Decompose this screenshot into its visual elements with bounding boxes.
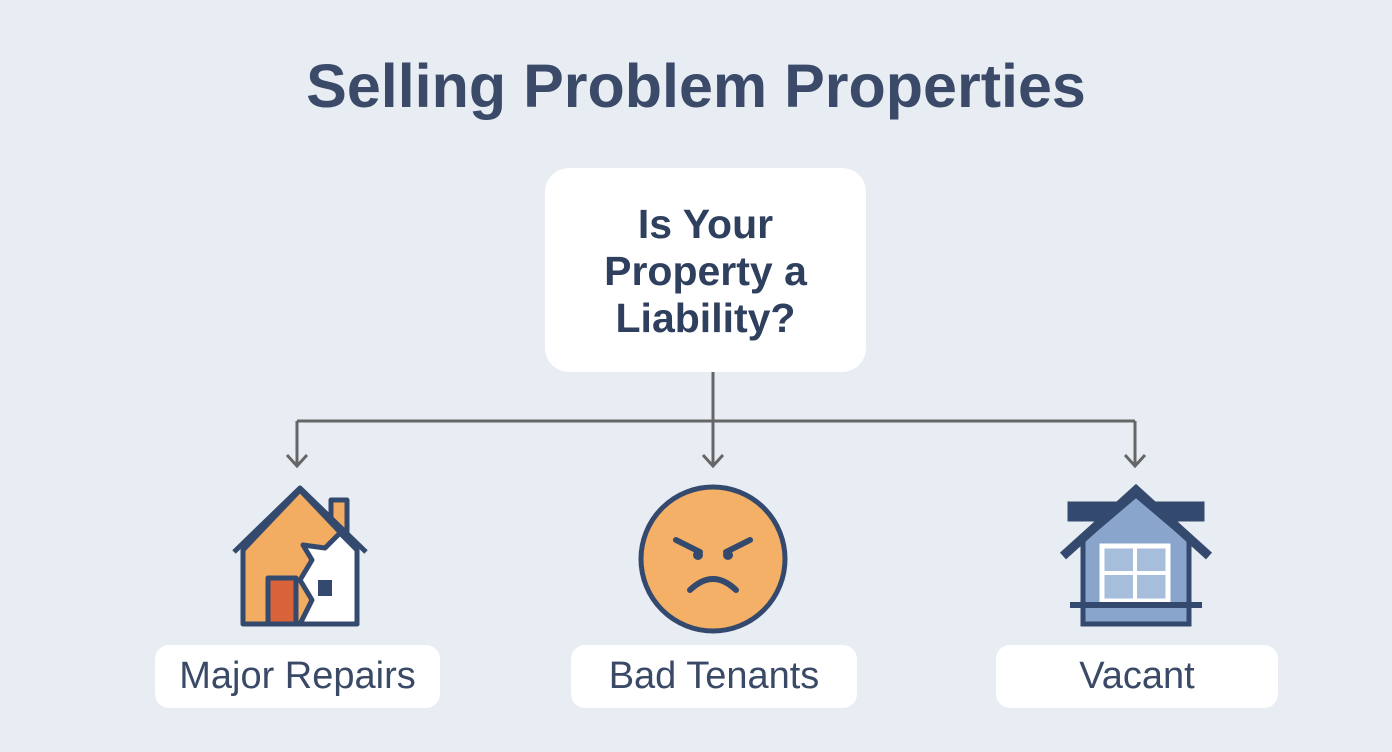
central question box: Property a <box>604 248 807 294</box>
connector arrows <box>287 372 1145 466</box>
icon: angry face <box>641 487 785 631</box>
label: major repairs <box>155 645 440 708</box>
label: vacant: Vacant <box>1079 655 1195 697</box>
central question box <box>545 168 866 372</box>
title: Selling Problem Properties <box>306 52 1086 120</box>
label: bad tenants <box>571 645 857 708</box>
label: vacant <box>996 645 1278 708</box>
central question box: Liability? <box>616 295 795 341</box>
icon: vacant house <box>1063 490 1209 624</box>
central question box: Is Your <box>638 201 773 247</box>
icon: broken house <box>234 488 366 624</box>
label: major repairs: Major Repairs <box>179 655 416 697</box>
label: bad tenants: Bad Tenants <box>609 655 819 697</box>
